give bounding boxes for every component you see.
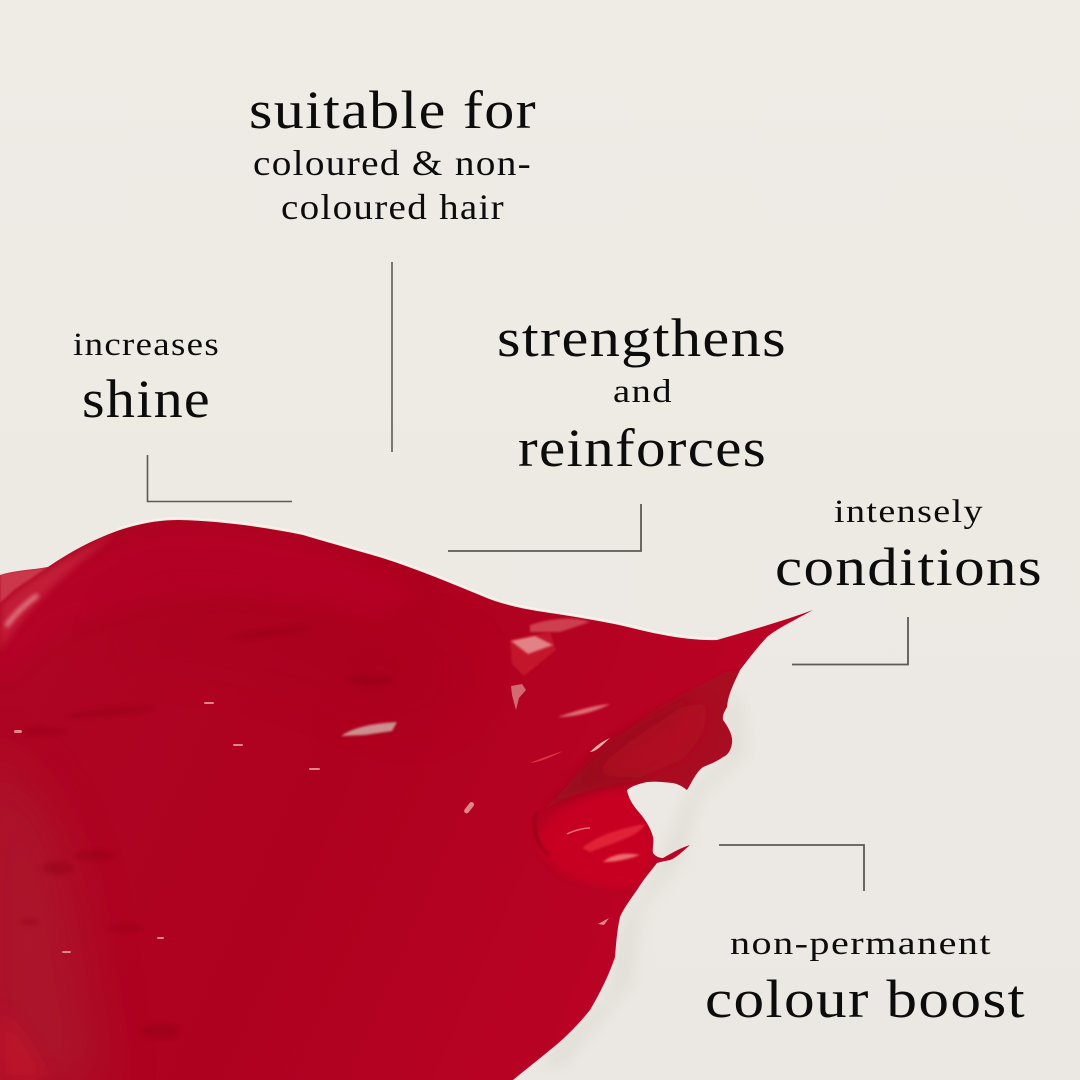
lower left fold xyxy=(1,1026,41,1078)
callout: strengthens and reinforces: and xyxy=(613,374,673,410)
callout: non-permanent colour boost: colour boost xyxy=(705,969,1026,1029)
leader line: suitable for xyxy=(391,262,393,452)
leader line: shine xyxy=(148,455,292,502)
leader line: colour boost xyxy=(719,845,864,891)
callout: suitable for: coloured & non- xyxy=(253,143,532,183)
callout: increases shine: increases xyxy=(73,327,220,363)
swatch soft shadow xyxy=(540,690,745,1068)
callout: non-permanent colour boost xyxy=(705,926,1026,1029)
swatch body xyxy=(0,520,813,1080)
streaks xyxy=(20,624,392,1038)
callout: intensely conditions: intensely xyxy=(834,494,984,530)
callout: suitable for xyxy=(249,80,537,227)
leader line: strengthens xyxy=(448,504,641,551)
callout: suitable for: coloured hair xyxy=(281,187,505,227)
rim at top left xyxy=(0,540,102,646)
red cream swatch xyxy=(0,518,813,1080)
callout: increases shine: shine xyxy=(82,369,211,429)
upper right highlight block xyxy=(510,632,556,676)
leader line: conditions xyxy=(792,617,908,664)
callout: increases shine xyxy=(73,327,220,429)
callout: strengthens and reinforces xyxy=(497,308,787,478)
lower lobe xyxy=(540,790,653,886)
dark fold pocket xyxy=(540,670,741,812)
swatch top highlight edge xyxy=(117,518,717,638)
glints xyxy=(14,702,475,953)
callout: strengthens and reinforces: reinforces xyxy=(518,418,767,478)
callout: suitable for: suitable for xyxy=(249,80,537,140)
callout: non-permanent colour boost: non-permanent xyxy=(730,926,992,962)
callout: strengthens and reinforces: strengthens xyxy=(497,308,787,368)
swatch shading and highlights xyxy=(0,530,741,1080)
callout: intensely conditions xyxy=(775,494,1043,597)
callout: intensely conditions: conditions xyxy=(775,537,1043,597)
